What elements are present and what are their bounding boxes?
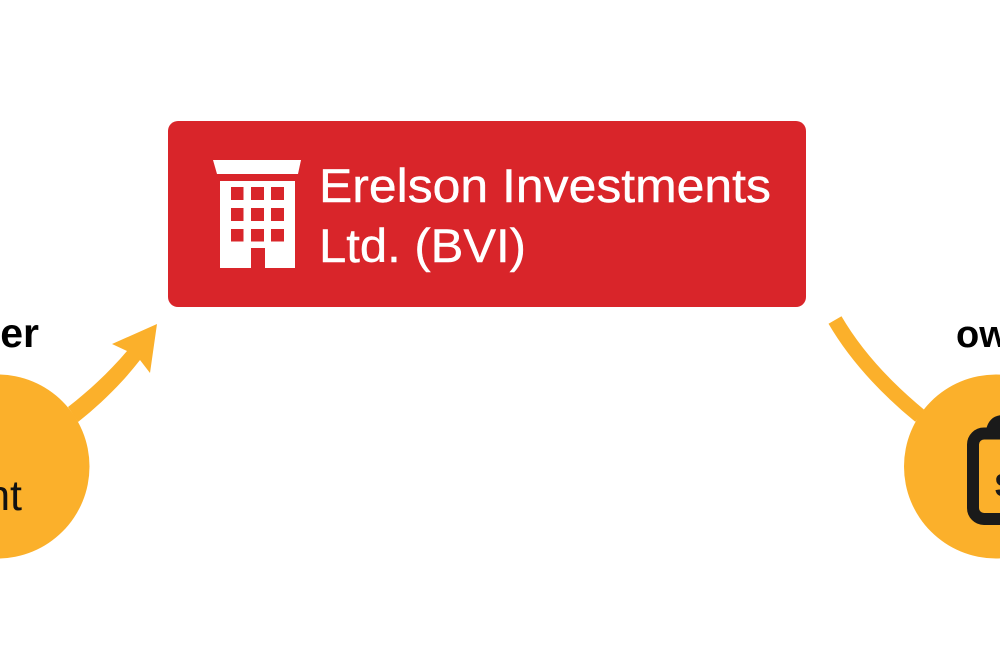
left circle with label — [0, 310, 90, 558]
icon: office building — [213, 160, 301, 268]
panel: company box — [168, 121, 806, 307]
company name — [319, 159, 771, 272]
company name: Erelson Investments — [319, 159, 771, 212]
icon: clipboard with dollar sign — [973, 415, 1000, 519]
right circle with label — [904, 314, 1000, 558]
arrow: left circle to company — [68, 324, 157, 422]
company name: Ltd. (BVI) — [319, 219, 526, 272]
connector: company to right circle — [835, 320, 920, 416]
